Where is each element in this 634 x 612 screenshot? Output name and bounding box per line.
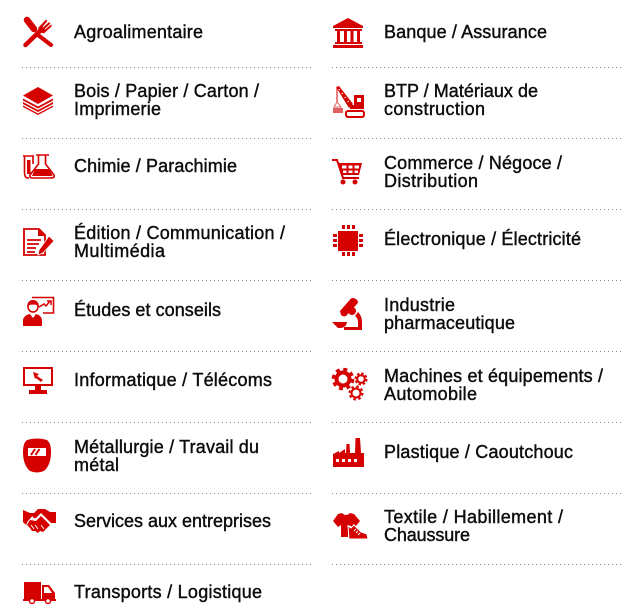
item: Textile / Habillement / Chaussure: Chaussure (384, 525, 470, 545)
item: Commerce / Négoce / Distribution (332, 153, 562, 191)
item: Édition / Communication / Multimédia: Multimédia (74, 241, 166, 261)
item: Électronique / Électricité: Électronique / Électricité (384, 229, 581, 249)
icon: microscope (332, 298, 362, 330)
item: Agroalimentaire (26, 20, 203, 45)
icon: test tube and flask (23, 155, 54, 178)
item: Machines et équipements / Automobile: Automobile (384, 384, 477, 404)
icon: welding mask (23, 438, 51, 472)
icon: handshake (23, 509, 56, 533)
item: Services aux entreprises (23, 509, 271, 533)
icon: factory (333, 438, 364, 467)
item: Banque / Assurance (333, 18, 547, 48)
item: Commerce / Négoce / Distribution: Distribution (384, 171, 478, 191)
item: Métallurgie / Travail du métal: Métallurgie / Travail du (74, 437, 259, 457)
item: BTP / Matériaux de construction: BTP / Matériaux de (384, 81, 538, 101)
icon: monitor with cursor (24, 368, 52, 394)
item: Bois / Papier / Carton / Imprimerie (23, 81, 259, 119)
item: Plastique / Caoutchouc: Plastique / Caoutchouc (384, 442, 573, 462)
item: Chimie / Parachimie: Chimie / Parachimie (74, 156, 237, 176)
item: Métallurgie / Travail du métal (23, 437, 259, 475)
item: Services aux entreprises: Services aux entreprises (74, 511, 271, 531)
item: Banque / Assurance: Banque / Assurance (384, 22, 547, 42)
item: Métallurgie / Travail du métal: métal (74, 455, 119, 475)
icon: gears (333, 369, 366, 400)
item: Textile / Habillement / Chaussure: Textile / Habillement / (384, 507, 563, 527)
item: Informatique / Télécoms (24, 368, 272, 394)
item: Électronique / Électricité (333, 225, 581, 256)
item: BTP / Matériaux de construction: construction (384, 99, 485, 119)
item: Études et conseils (23, 298, 221, 326)
icon: microchip (333, 225, 363, 256)
item: Chimie / Parachimie (23, 155, 237, 178)
icon: bank building (333, 18, 363, 48)
icon: consultant with chart board (23, 298, 54, 326)
item: Édition / Communication / Multimédia (24, 223, 285, 261)
item: BTP / Matériaux de construction (333, 81, 538, 119)
item: Machines et équipements / Automobile (333, 366, 603, 404)
item: Industrie pharmaceutique: pharmaceutique (384, 313, 515, 333)
item: Industrie pharmaceutique (332, 295, 515, 333)
item: Édition / Communication / Multimédia: Édition / Communication / (74, 223, 285, 243)
icon: shopping cart (332, 160, 362, 184)
icon: crawler crane (333, 86, 364, 117)
item: Bois / Papier / Carton / Imprimerie: Imprimerie (74, 99, 161, 119)
item: Commerce / Négoce / Distribution: Commerce / Négoce / (384, 153, 562, 173)
icon: delivery truck (23, 582, 56, 604)
item: Informatique / Télécoms: Informatique / Télécoms (74, 370, 272, 390)
item: Textile / Habillement / Chaussure (333, 507, 563, 545)
icon: stacked layers (23, 87, 53, 115)
icon: fork and knife (26, 20, 52, 45)
item: Industrie pharmaceutique: Industrie (384, 295, 455, 315)
item: Études et conseils: Études et conseils (74, 300, 221, 320)
icon: shirt and shoe (333, 513, 368, 539)
item: Agroalimentaire: Agroalimentaire (74, 22, 203, 42)
item: Plastique / Caoutchouc (333, 438, 573, 467)
icon: document and pencil (24, 229, 54, 255)
item: Transports / Logistique: Transports / Logistique (74, 582, 262, 602)
item: Machines et équipements / Automobile: Machines et équipements / (384, 366, 603, 386)
item: Bois / Papier / Carton / Imprimerie: Bois / Papier / Carton / (74, 81, 259, 101)
